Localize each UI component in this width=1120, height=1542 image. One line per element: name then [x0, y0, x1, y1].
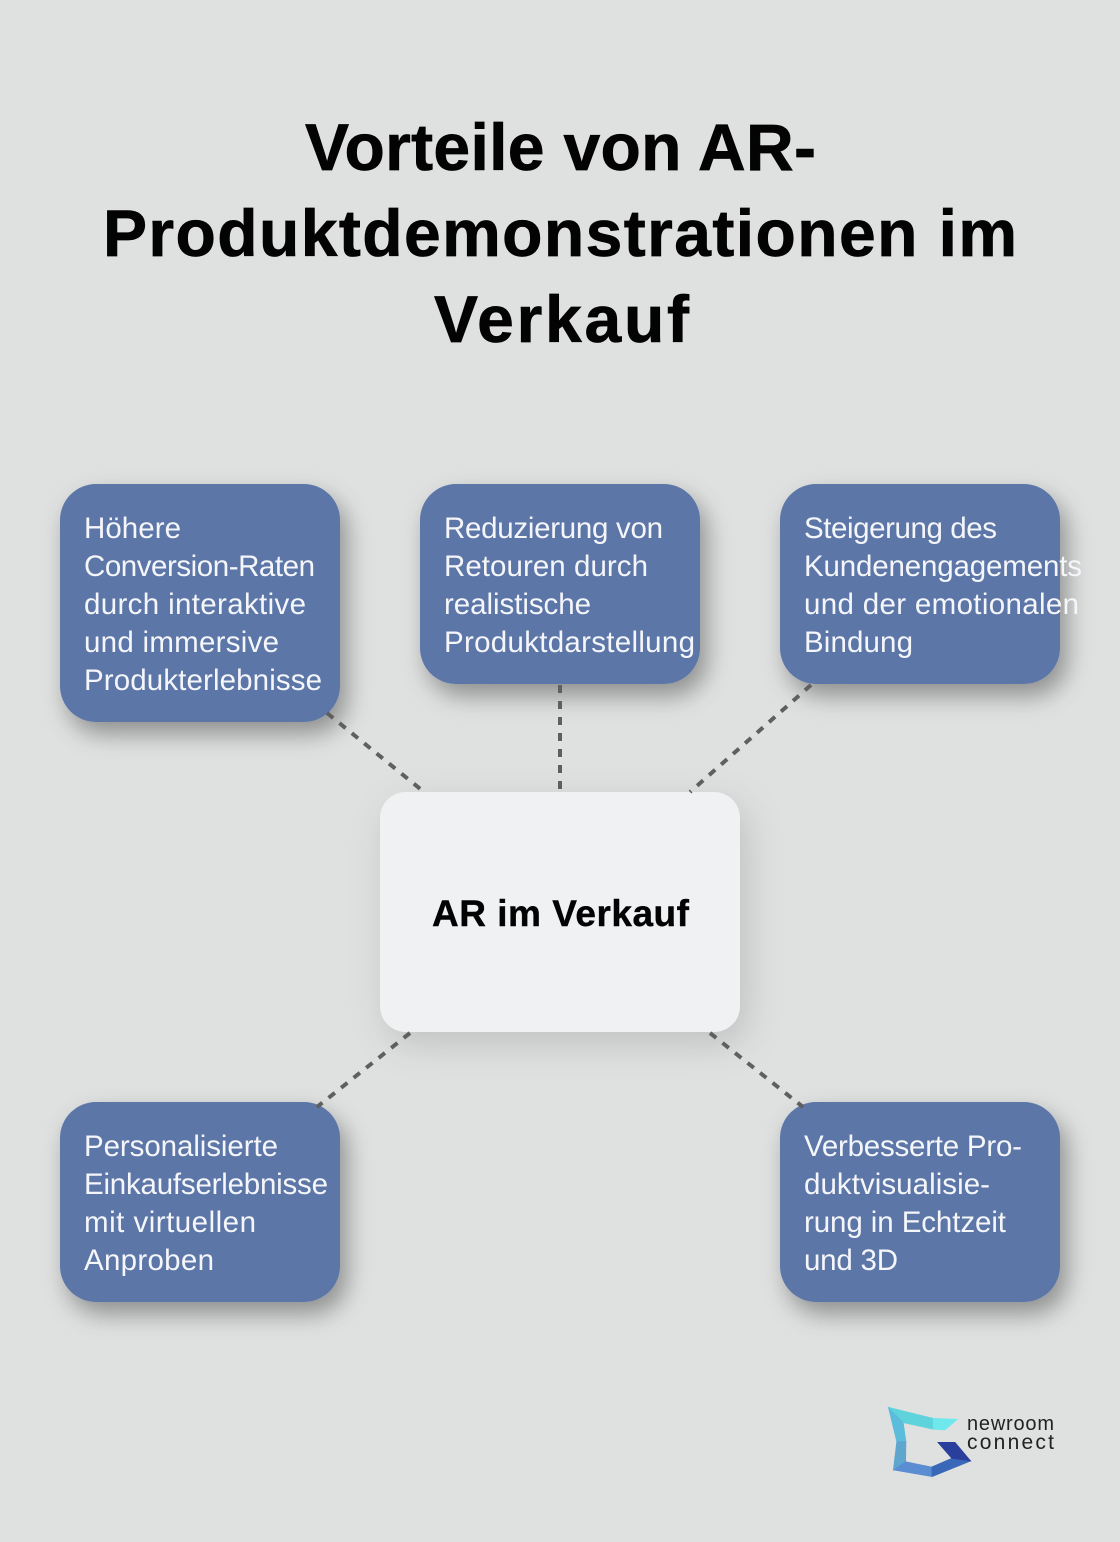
panel: Verbesserte Produktvisualisierung: duktvisualisie-: [804, 1168, 990, 1201]
panel: Höhere Conversion-Raten: Produkterlebnisse: [84, 664, 322, 697]
panel: Steigerung des Kundenengagements: Bindung: [804, 626, 913, 659]
panel: Reduzierung von Retouren: Produktdarstellung: [444, 626, 695, 659]
panel: Steigerung des Kundenengagements: und der emotionalen: [804, 588, 1079, 621]
panel: Steigerung des Kundenengagements: Steigerung des: [804, 512, 997, 545]
panel: Personalisierte Einkaufserlebnisse: [60, 1102, 340, 1302]
panel: Verbesserte Produktvisualisierung: und 3D: [804, 1244, 898, 1277]
panel: center AR im Verkauf: AR im Verkauf: [432, 893, 690, 934]
panel: Verbesserte Produktvisualisierung: rung in Echtzeit: [804, 1206, 1006, 1239]
panel: Steigerung des Kundenengagements: [780, 484, 1082, 684]
panel: Personalisierte Einkaufserlebnisse: mit virtuellen: [84, 1206, 256, 1239]
panel: Verbesserte Produktvisualisierung: [780, 1102, 1060, 1302]
title: Vorteile von AR-: [305, 110, 816, 184]
title: Produktdemonstrationen im: [103, 196, 1017, 270]
title: Verkauf: [434, 282, 690, 356]
panel: Personalisierte Einkaufserlebnisse: Anproben: [84, 1244, 214, 1277]
panel: Reduzierung von Retouren: [420, 484, 700, 684]
panel: Höhere Conversion-Raten: [60, 484, 340, 722]
panel: Personalisierte Einkaufserlebnisse: Personalisierte: [84, 1130, 278, 1163]
panel: Steigerung des Kundenengagements: Kundenengagements: [804, 550, 1082, 583]
panel: Personalisierte Einkaufserlebnisse: Einkaufserlebnisse: [84, 1168, 328, 1201]
panel: Reduzierung von Retouren: Reduzierung von: [444, 512, 663, 545]
panel: Verbesserte Produktvisualisierung: Verbesserte Pro-: [804, 1130, 1022, 1163]
panel: Höhere Conversion-Raten: und immersive: [84, 626, 279, 659]
panel: Höhere Conversion-Raten: Höhere: [84, 512, 181, 545]
panel: Höhere Conversion-Raten: Conversion-Raten: [84, 550, 315, 583]
dashed connectors: [317, 685, 811, 1107]
logo: newroom connect: [888, 1407, 1054, 1477]
title: [103, 110, 1017, 356]
logo: newroom connect: connect: [967, 1431, 1054, 1454]
panel: Reduzierung von Retouren: Retouren durch: [444, 550, 648, 583]
logo: newroom connect: newroom: [967, 1413, 1054, 1435]
panel: Reduzierung von Retouren: realistische: [444, 588, 591, 621]
panel: Höhere Conversion-Raten: durch interaktive: [84, 588, 306, 621]
panel: center AR im Verkauf: [380, 792, 740, 1032]
